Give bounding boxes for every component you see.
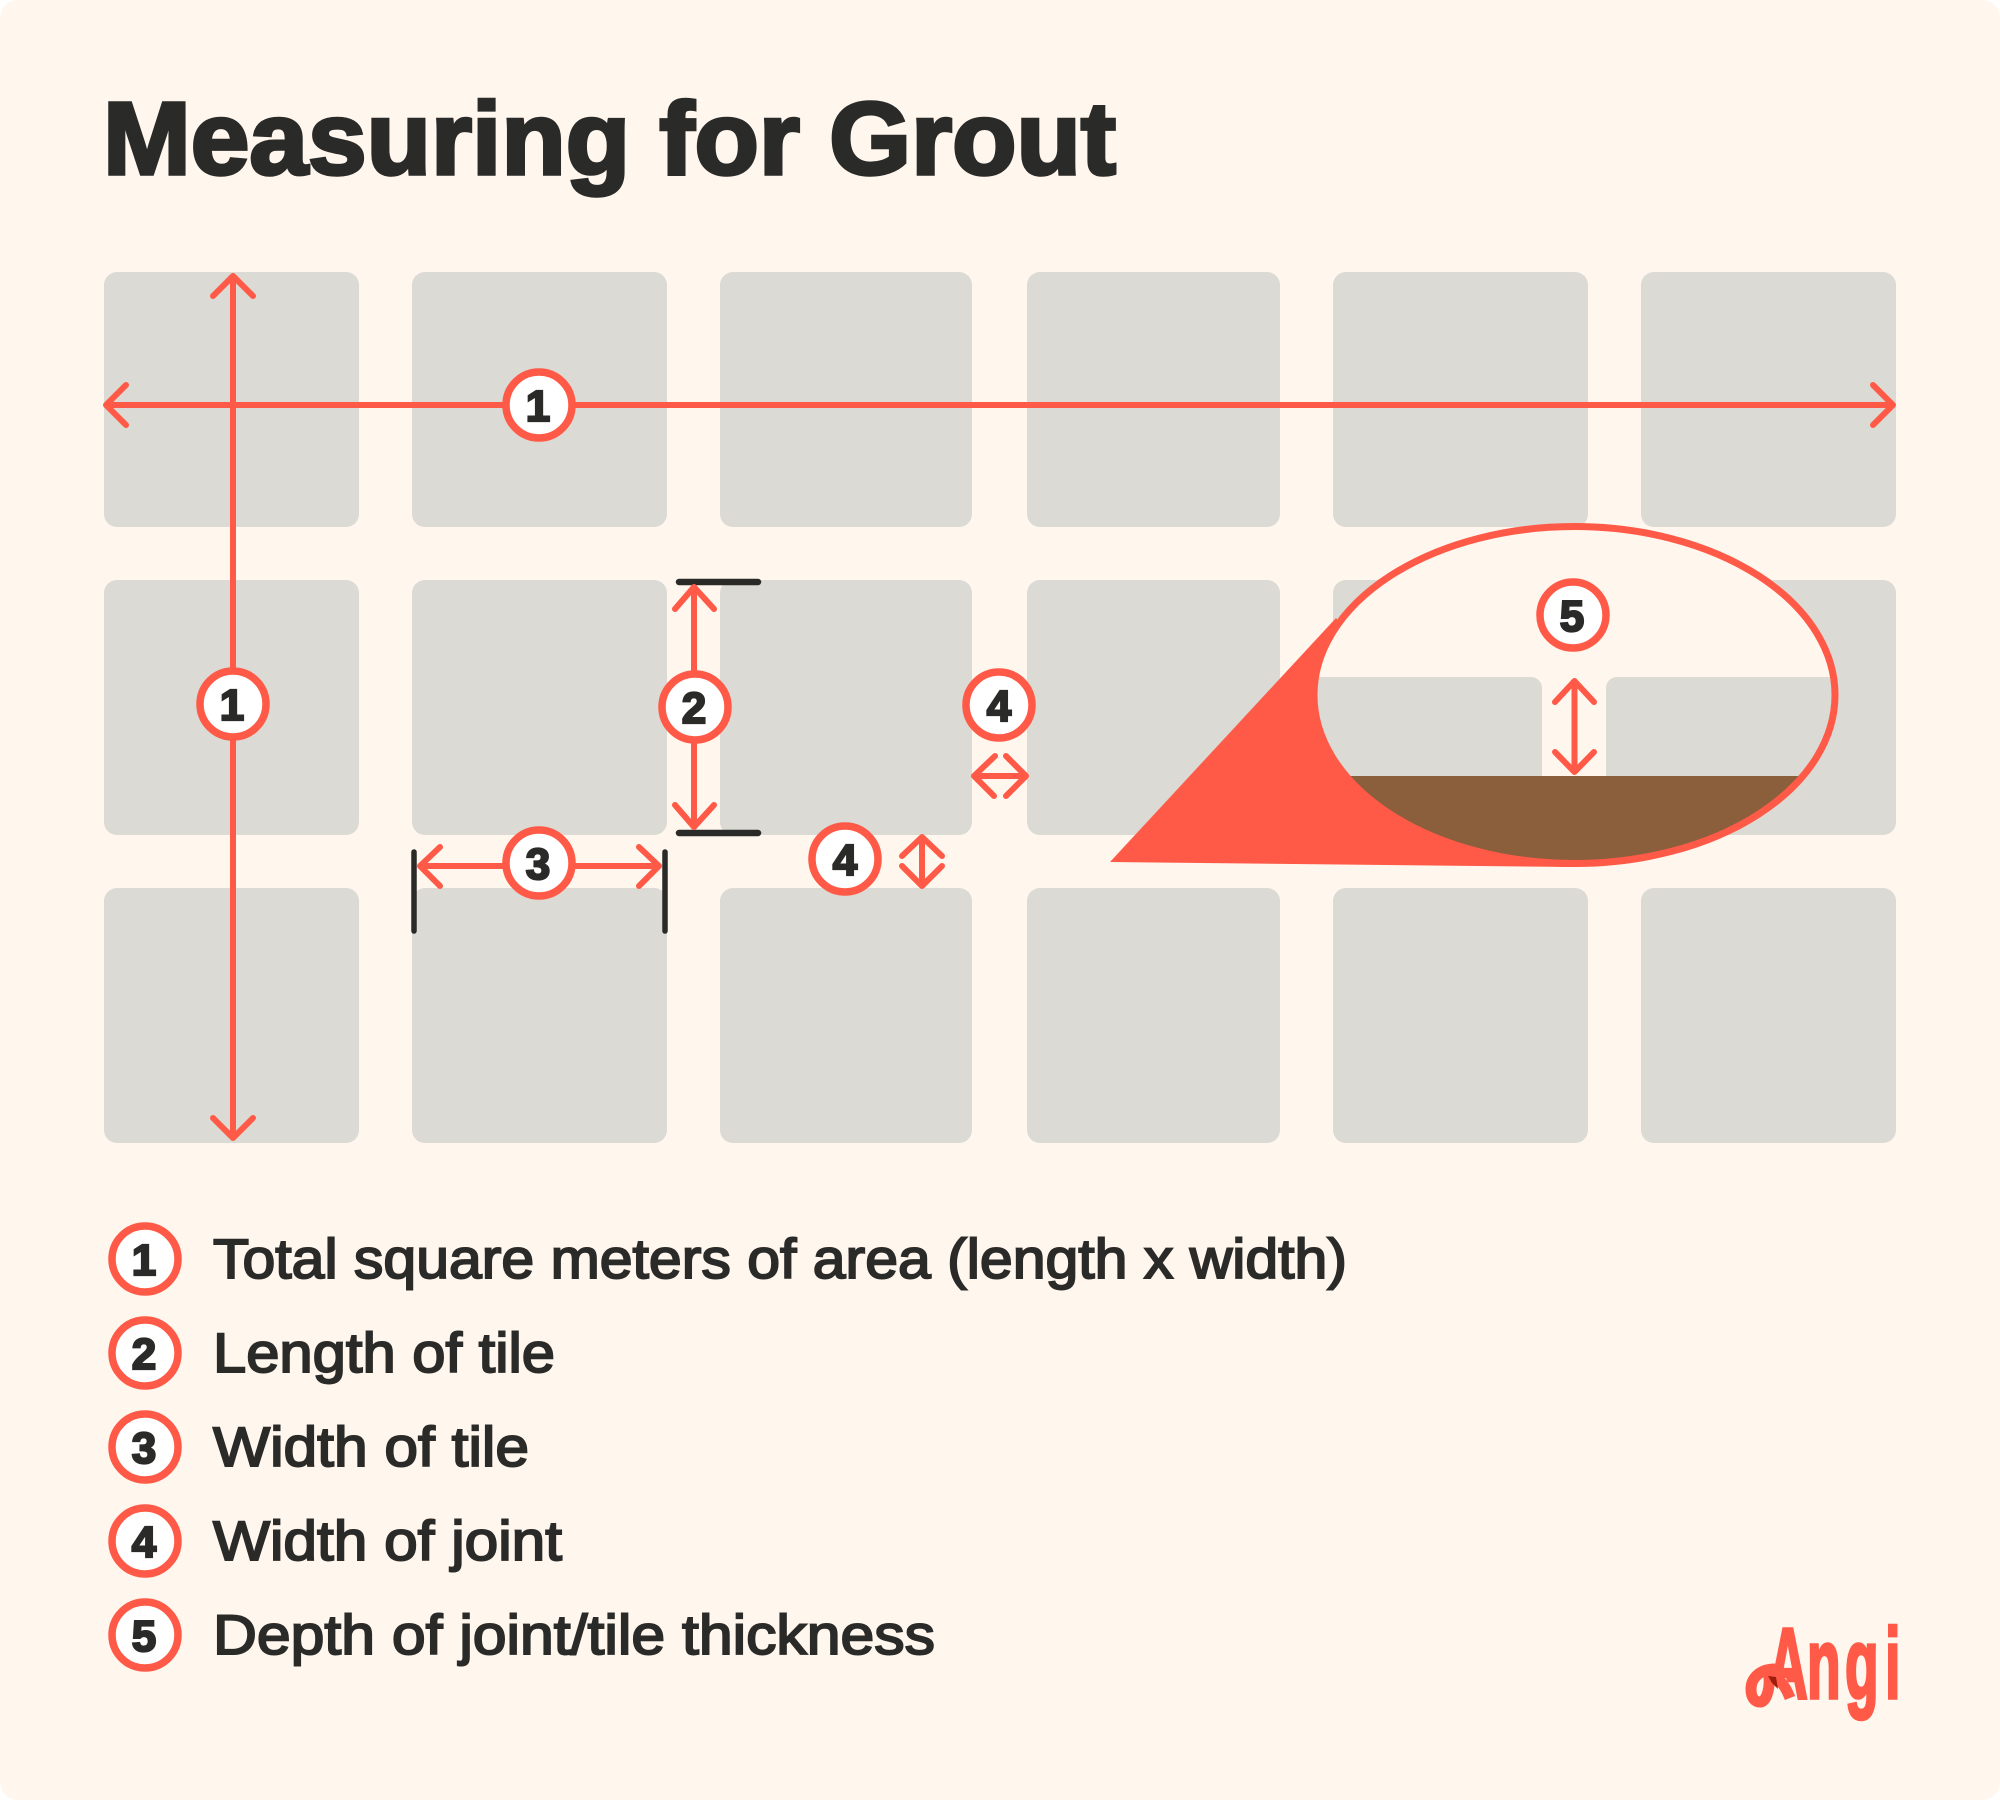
legend item 1: Total square meters of area (length x width) [213,1227,1347,1290]
legend item 2: Length of tile [213,1321,555,1384]
legend item 2 [112,1320,555,1386]
magnifier callout [1110,526,1906,876]
legend item 4: 4 [132,1518,157,1567]
marker 4 lower [812,826,878,892]
arrow: vertical joint width [902,837,942,886]
arrow: joint depth [1555,681,1594,772]
legend item 4: Width of joint [213,1509,562,1572]
legend item 1: 1 [132,1236,156,1285]
arrow: total width (1) [106,385,1893,425]
marker 4 lower: 4 [833,836,858,885]
arrow: total length (1) [213,276,253,1138]
legend item 2: 2 [132,1330,156,1379]
marker 2 [662,674,728,740]
magnifier lens fill [1314,526,1835,864]
lens cross-section [1318,677,1832,860]
marker 4 upper: 4 [987,682,1012,731]
legend item 3 [112,1414,529,1480]
marker 1 on vertical arrow: 1 [220,681,244,730]
arrow: length of tile [675,587,714,827]
marker 3 [506,830,572,896]
marker 2: 2 [682,684,706,733]
marker 3: 3 [526,840,550,889]
legend item 3: 3 [132,1424,156,1473]
title: Measuring for Grout [103,81,1116,196]
marker 5: 5 [1560,592,1584,641]
arrow: width of tile [420,847,659,886]
tile length ticks [679,582,758,833]
marker 1 on horizontal arrow [506,372,572,438]
magnifier pointer [1110,618,1574,867]
lens outline [1314,526,1835,864]
legend item 3: Width of tile [213,1415,529,1478]
Angi logo: Angi [1768,1609,1900,1720]
legend item 5: 5 [132,1612,156,1661]
legend item 5: Depth of joint/tile thickness [213,1603,935,1666]
marker 1 on horizontal arrow: 1 [526,382,550,431]
marker 5 [1540,582,1606,648]
marker 1 on vertical arrow [200,671,266,737]
legend [112,1226,1347,1668]
legend item 4 [112,1508,562,1574]
arrow: horizontal joint width [974,756,1026,796]
marker 4 upper [966,672,1032,738]
tile grid [104,272,1896,1143]
tile width ticks [414,852,665,931]
